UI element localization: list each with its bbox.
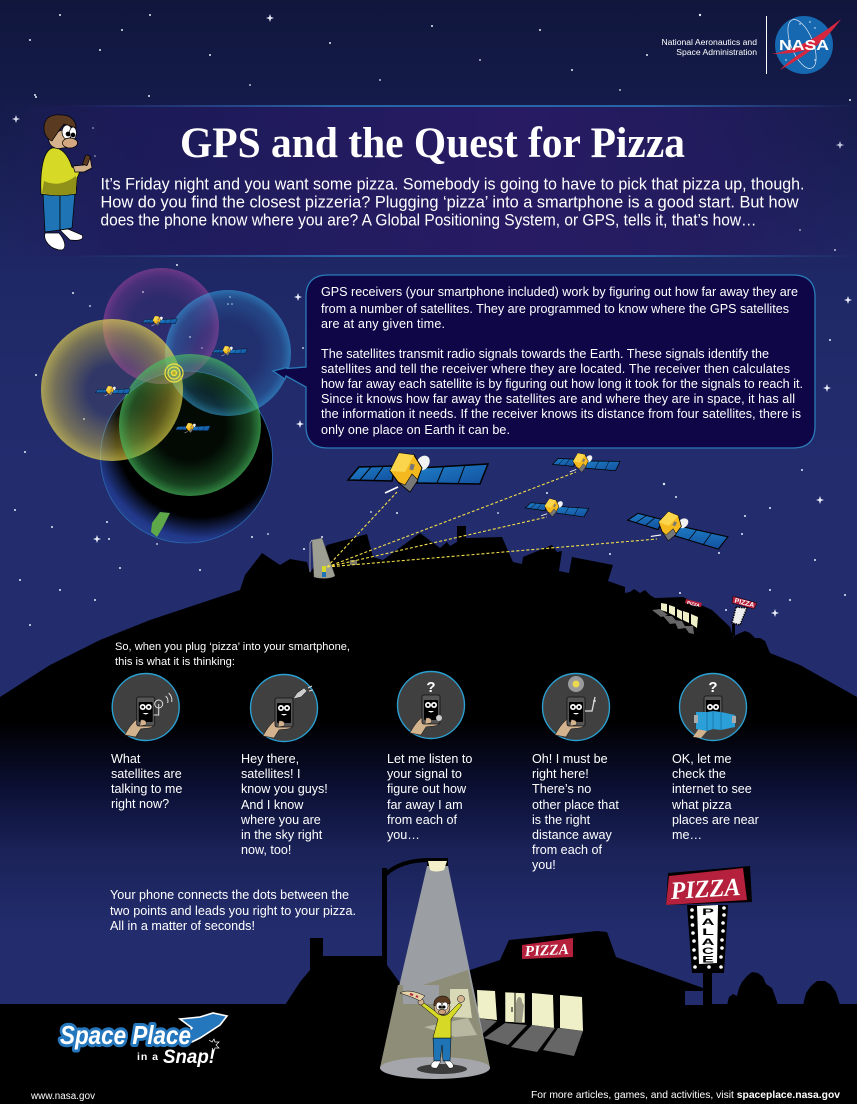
- Space Place in a Snap logo: Space Place: [60, 1020, 191, 1050]
- title band: [0, 105, 857, 257]
- step 4 text: from each of: [532, 843, 602, 857]
- restaurant pizza sign: PIZZA: [524, 942, 569, 960]
- step 4 text: other place that: [532, 798, 619, 812]
- lead-in text: this is what it is thinking:: [115, 656, 235, 668]
- step 5 text: OK, let me: [672, 752, 732, 766]
- step 3 text: [387, 752, 472, 842]
- callout: how GPS receivers work: the information it needs. If the receiver knows its distance from four satellites, there is: [321, 407, 801, 421]
- Space Place in a Snap logo: Snap!: [163, 1047, 215, 1068]
- step 5 text: what pizza: [671, 798, 732, 812]
- step 4 text: [532, 752, 619, 872]
- satellite 2: [552, 451, 620, 475]
- intro paragraph: [100, 174, 804, 230]
- step 2 text: where you are: [240, 813, 321, 827]
- satellite 3: [525, 496, 589, 521]
- satellite 4: [625, 501, 730, 557]
- step 2 text: in the sky right: [241, 828, 323, 842]
- step 1 text: [111, 752, 182, 811]
- step 2 text: now, too!: [241, 843, 291, 857]
- step 4 text: Oh! I must be: [532, 752, 608, 766]
- earth globe: [100, 371, 272, 543]
- step 1 text: satellites are: [111, 767, 182, 781]
- step 3 icon: [398, 672, 464, 738]
- step 2 text: know you guys!: [241, 782, 328, 796]
- callout: how GPS receivers work: [273, 275, 815, 448]
- Pizza Palace sign: E: [702, 954, 714, 966]
- step 5 text: [671, 752, 759, 842]
- green signal sphere: [119, 354, 261, 496]
- Space Place in a Snap logo: in a: [137, 1051, 158, 1063]
- character with smartphone: [41, 115, 92, 250]
- step 4 text: right here!: [532, 767, 589, 781]
- closing text: All in a matter of seconds!: [110, 919, 255, 933]
- location target: [165, 364, 183, 382]
- NASA wordmark and logo: Space Administration: [676, 47, 757, 57]
- step 4 text: is the right: [532, 813, 591, 827]
- yellow signal sphere: [41, 319, 183, 461]
- callout: how GPS receivers work: satellites and tell the receiver where they are located. The receiver then calculates: [321, 362, 790, 376]
- satellite signal lines: [327, 472, 657, 567]
- step 3 text: figure out how: [387, 782, 467, 796]
- step 2 icon: [250, 674, 318, 742]
- lead-in text: [115, 641, 350, 668]
- step 1 icon: [112, 674, 179, 740]
- step 5 icon: ?: [708, 679, 718, 696]
- step 5 text: check the: [672, 767, 726, 781]
- Pizza Palace sign: C: [702, 946, 714, 957]
- Pizza Palace sign: L: [702, 927, 714, 938]
- lead-in text: So, when you plug ‘pizza’ into your smartphone,: [115, 641, 350, 653]
- large satellite 1: [348, 453, 488, 493]
- closing text: [110, 888, 356, 933]
- small window of sky behind building: [685, 991, 703, 1005]
- foreground silhouette: street, house, lamp post, restaurant, trees: [0, 858, 857, 1104]
- distant pizza restaurant: PIZZA: [686, 600, 701, 608]
- intro paragraph: It’s Friday night and you want some pizza. Somebody is going to have to pick that pizza up, though.: [100, 174, 804, 194]
- footer credit: For more articles, games, and activities, visit spaceplace.nasa.gov: [531, 1090, 840, 1101]
- step 5 icon: [680, 674, 746, 740]
- footer url: www.nasa.gov: [30, 1091, 95, 1102]
- NASA wordmark and logo: National Aeronautics and: [661, 37, 757, 47]
- spotlight from street lamp: [380, 861, 490, 1079]
- intro paragraph: How do you find the closest pizzeria? Plugging ‘pizza’ into a smartphone is a good start. But how: [100, 192, 800, 212]
- callout: how GPS receivers work: Since it knows how far away the satellites are and where they are in space, it has all: [321, 392, 795, 406]
- step 4 text: distance away: [532, 828, 613, 842]
- magenta signal sphere: [103, 268, 219, 384]
- person cheering with pizza slice: [400, 991, 464, 1068]
- step 2 text: Hey there,: [241, 752, 299, 766]
- step 5 text: places are near: [672, 813, 759, 827]
- step 4 text: you!: [532, 858, 556, 872]
- step 3 text: your signal to: [387, 767, 462, 781]
- Pizza Palace sign: [666, 866, 752, 973]
- Pizza Palace sign: A: [702, 917, 715, 928]
- callout: how GPS receivers work: how far away each satellite is by figuring out how long it took for the signals to reach it.: [321, 377, 803, 391]
- distant pizza restaurant: [652, 599, 702, 634]
- mini satellites: [95, 316, 247, 433]
- step 4 text: There’s no: [532, 782, 591, 796]
- closing text: Your phone connects the dots between the: [110, 888, 349, 902]
- step 2 text: And I know: [241, 798, 304, 812]
- Pizza Palace sign: A: [702, 937, 715, 948]
- step 2 text: [240, 752, 328, 857]
- Pizza Palace sign: P: [702, 907, 715, 918]
- closing text: two points and leads you right to your pizza.: [110, 904, 356, 918]
- callout: how GPS receivers work: from a number of satellites. They are programmed to know where the GPS satellites: [321, 302, 789, 316]
- Space Place in a Snap logo: [60, 1013, 227, 1068]
- step 3 text: you…: [387, 828, 420, 842]
- step 5 text: internet to see: [672, 782, 752, 796]
- step 3 text: Let me listen to: [387, 752, 472, 766]
- blue signal sphere: [165, 290, 291, 416]
- callout: how GPS receivers work: are at any given time.: [321, 317, 445, 331]
- hill silhouette with houses: [0, 526, 857, 1005]
- step 1 text: What: [111, 752, 141, 766]
- title: GPS and the Quest for Pizza: [180, 120, 685, 167]
- distant pizza sign: PIZZA: [734, 598, 755, 609]
- Pizza Palace sign: PIZZA: [669, 874, 741, 905]
- callout: how GPS receivers work: The satellites transmit radio signals towards the Earth. These signals identify the: [321, 347, 769, 361]
- callout: how GPS receivers work: only one place on Earth it can be.: [321, 423, 510, 437]
- distant street lamp and person: [310, 538, 357, 578]
- distant pizza sign: [732, 596, 757, 636]
- step 1 text: right now?: [111, 797, 169, 811]
- step 3 text: far away I am: [387, 798, 463, 812]
- callout: how GPS receivers work: GPS receivers (your smartphone included) work by figuring out how far away they are: [321, 285, 798, 299]
- step 2 text: satellites! I: [241, 767, 300, 781]
- overlapping satellite range diagram: [41, 268, 291, 543]
- restaurant windows and door: [473, 990, 583, 1056]
- step 5 text: me…: [672, 828, 702, 842]
- step 3 icon: ?: [426, 679, 436, 696]
- step 4 icon: [542, 674, 610, 740]
- intro paragraph: does the phone know where you are? A Global Positioning System, or GPS, tells it, that’s how…: [100, 210, 756, 230]
- step 3 text: from each of: [387, 813, 457, 827]
- NASA wordmark and logo: [661, 16, 841, 74]
- step 1 text: talking to me: [111, 782, 182, 796]
- NASA wordmark and logo: NASA: [779, 38, 830, 54]
